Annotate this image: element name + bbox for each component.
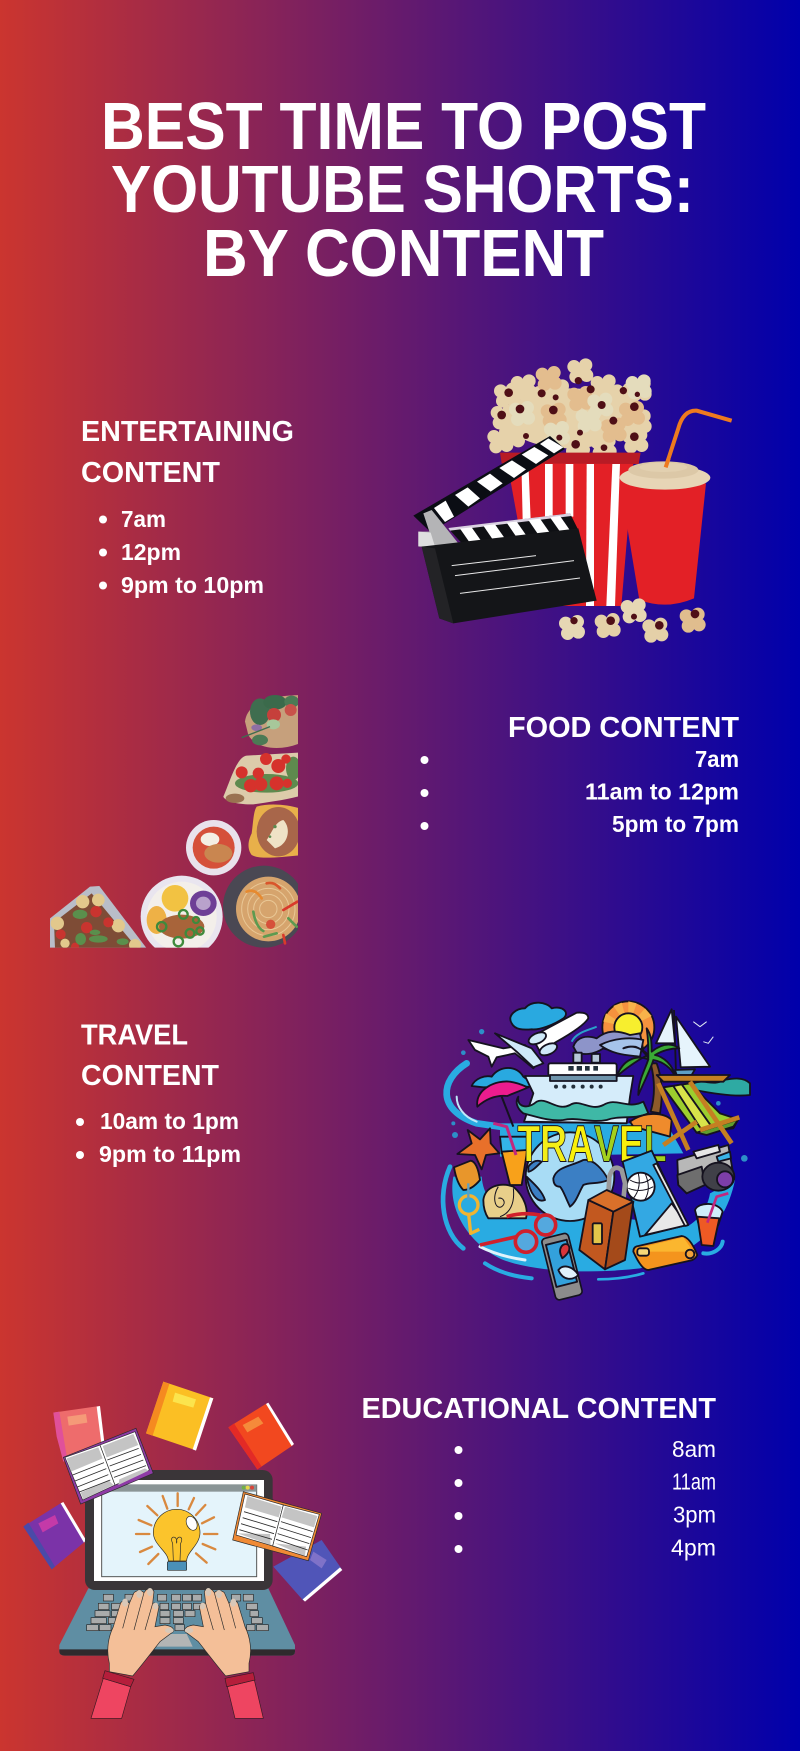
- panel: travel content text: CONTENT: [81, 1060, 219, 1092]
- panel: food content text: 5pm to 7pm: [612, 811, 739, 837]
- stuffed pepper: [249, 805, 303, 858]
- left sleeve and hand: [91, 1588, 174, 1718]
- icon: laptop with books: [23, 1382, 342, 1718]
- noodle plate: [223, 866, 305, 948]
- panel: food content text: 7am: [695, 746, 739, 772]
- panel: entertaining content text: 7am: [121, 506, 166, 532]
- right drink: [695, 1193, 728, 1246]
- panel: travel content text: 9pm to 11pm: [99, 1141, 241, 1167]
- card: [633, 1236, 697, 1270]
- second cloud: [472, 1068, 530, 1087]
- blue swirl base: [443, 1029, 748, 1279]
- waves: [517, 1097, 648, 1121]
- suitcase: [579, 1168, 633, 1269]
- laptop: [59, 1470, 295, 1656]
- wrap: [242, 695, 303, 748]
- panel: entertaining content text: 9pm to 10pm: [121, 572, 264, 598]
- title: [101, 89, 706, 291]
- icon: travel illustration: [443, 1001, 750, 1301]
- icon: food dishes: [50, 695, 305, 958]
- icon: popcorn, drink and clapperboard: [413, 358, 732, 643]
- clapperboard: [413, 436, 597, 623]
- umbrella: [477, 1081, 528, 1127]
- panel: educational content text: 3pm: [673, 1502, 716, 1528]
- panel: travel content text: [76, 1020, 241, 1167]
- drink cup: [620, 411, 732, 605]
- right wave: [693, 1079, 750, 1096]
- camera: [677, 1145, 734, 1193]
- panel: food content text: [420, 712, 739, 837]
- open pizza: [223, 752, 303, 804]
- popcorn mass: [487, 358, 652, 459]
- panel: educational content text: 8am: [672, 1436, 716, 1462]
- soup bowl: [186, 820, 241, 875]
- open book purple: [63, 1428, 153, 1504]
- palm: [617, 1028, 679, 1113]
- loose popcorn: [559, 598, 706, 643]
- title: YOUTUBE SHORTS:: [111, 152, 694, 227]
- panel: travel content text: 10am to 1pm: [100, 1108, 239, 1134]
- island: [630, 1114, 672, 1137]
- cloud: [510, 1003, 566, 1030]
- stir-fry plate: [140, 876, 223, 948]
- nachos tray: [50, 886, 147, 951]
- panel: entertaining content text: ENTERTAINING: [81, 416, 294, 448]
- title: BEST TIME TO POST: [101, 89, 706, 164]
- panel: entertaining content text: CONTENT: [81, 457, 220, 489]
- closed books: [23, 1382, 342, 1602]
- cruise ship: [524, 1053, 633, 1123]
- open book orange: [233, 1492, 322, 1561]
- keyboard: [87, 1594, 268, 1631]
- airplane: [468, 1013, 588, 1068]
- panel: educational content text: 4pm: [671, 1534, 716, 1560]
- starfish: [457, 1128, 499, 1169]
- sun: [602, 1001, 654, 1053]
- shell: [483, 1185, 527, 1218]
- title: BY CONTENT: [203, 216, 604, 291]
- globe: [526, 1132, 614, 1221]
- panel: educational content text: EDUCATIONAL CONTENT: [362, 1393, 716, 1425]
- smoke: [572, 1027, 643, 1057]
- left drink: [493, 1123, 528, 1185]
- phone: [541, 1233, 583, 1301]
- travel word: TRAVEL: [517, 1115, 667, 1173]
- deck chair: [657, 1075, 739, 1150]
- tag and key: [454, 1161, 480, 1233]
- panel: travel content text: TRAVEL: [81, 1020, 188, 1052]
- right sleeve and hand: [185, 1588, 263, 1718]
- panel: food content text: FOOD CONTENT: [508, 712, 739, 744]
- panel: educational content text: 11am: [672, 1468, 716, 1494]
- sunglasses: [480, 1214, 556, 1252]
- popcorn bucket: [500, 453, 641, 606]
- panel: entertaining content text: 12pm: [121, 539, 181, 565]
- sailboat: [656, 1009, 713, 1075]
- panel: educational content text: [362, 1393, 716, 1560]
- panel: entertaining content text: [81, 416, 294, 598]
- light bulb: [136, 1493, 217, 1570]
- panel: food content text: 11am to 12pm: [585, 778, 739, 804]
- map book: [623, 1151, 688, 1237]
